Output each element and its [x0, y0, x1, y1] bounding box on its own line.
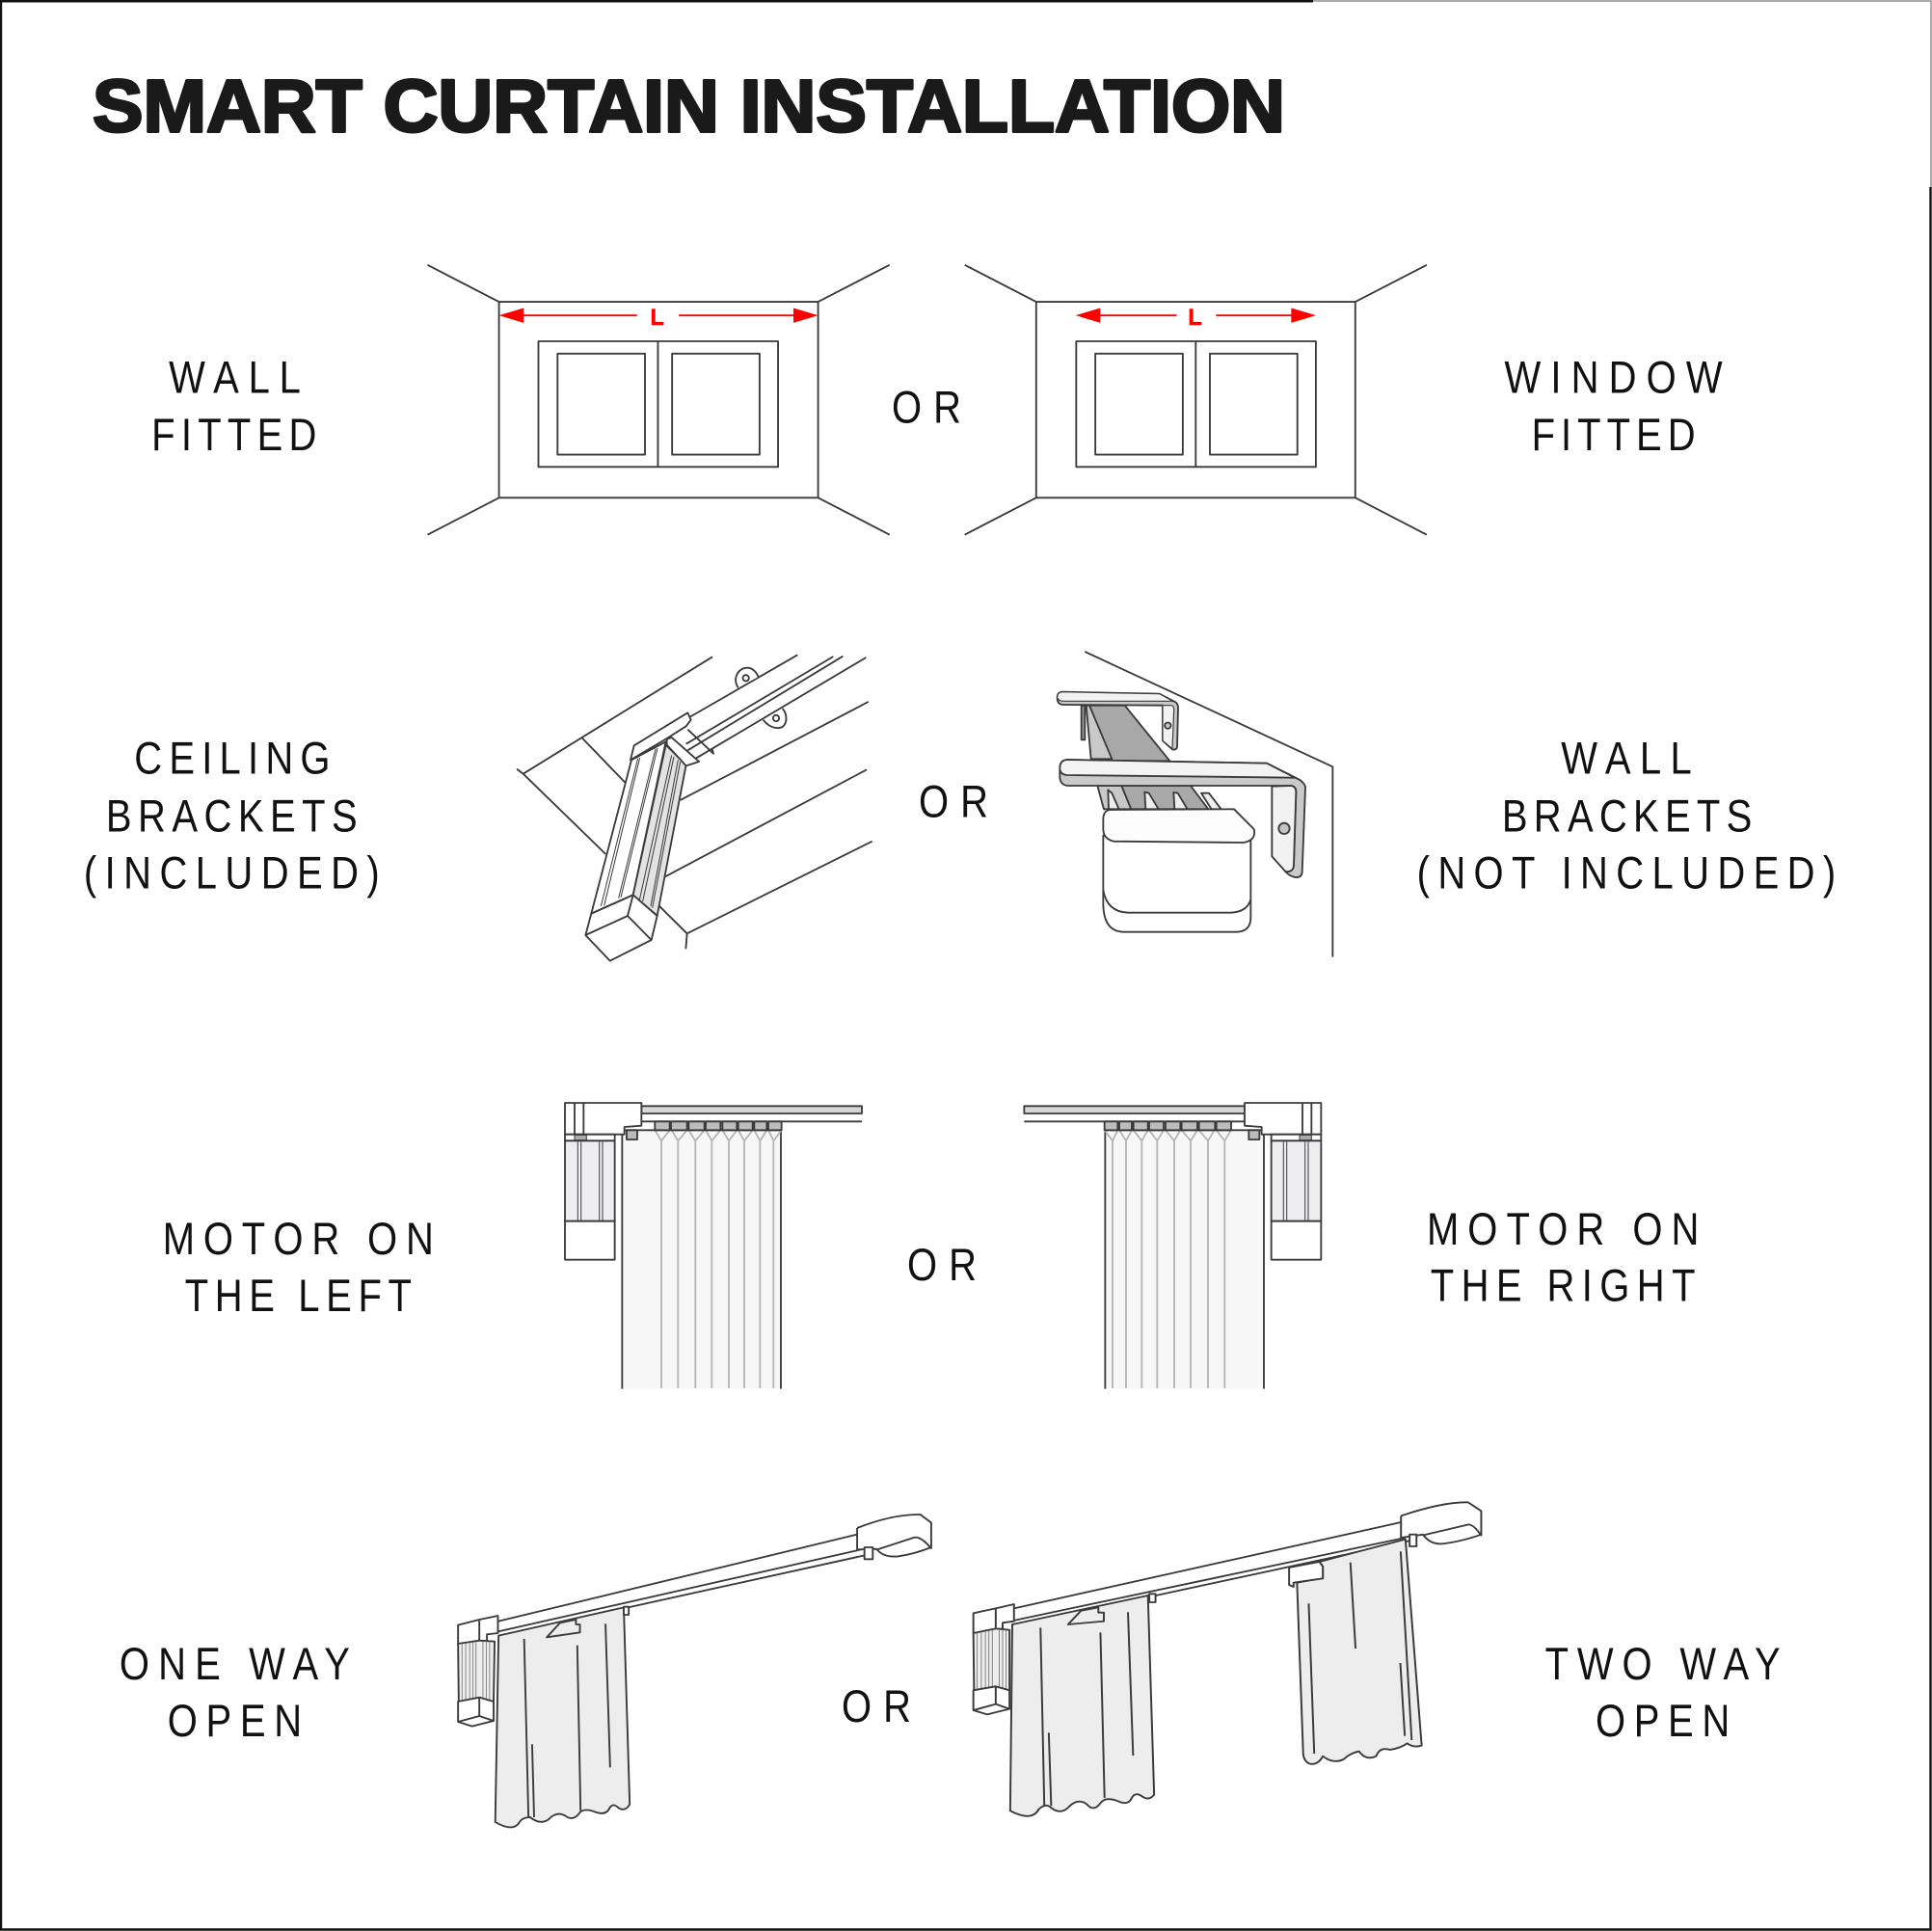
diagram: wall fitted window	[427, 265, 890, 535]
label: two way open: OPEN	[1596, 1696, 1730, 1747]
dimension arrow: window width: L	[1188, 306, 1202, 331]
rail lines	[686, 655, 866, 759]
track	[487, 1535, 865, 1634]
label: window fitted	[1504, 353, 1723, 461]
diagram: ceiling bracket with motor	[517, 655, 872, 961]
pleats	[1105, 1130, 1231, 1388]
label: ceiling brackets included: (INCLUDED)	[84, 847, 380, 898]
dimension arrow: full wall width	[499, 306, 818, 331]
title: SMART CURTAIN INSTALLATION	[93, 66, 1285, 148]
label: motor on the left	[163, 1214, 434, 1322]
motor head	[565, 1103, 641, 1135]
label: wall brackets not included: (NOT INCLUDED)	[1417, 847, 1836, 898]
motor body	[1272, 1140, 1321, 1221]
diagram: motor on right	[1024, 1103, 1321, 1389]
label: one way open	[120, 1639, 350, 1747]
label: motor on the right	[1427, 1204, 1699, 1311]
label: two way open	[1545, 1639, 1781, 1747]
label: motor on the right: THE RIGHT	[1431, 1261, 1696, 1311]
label: window fitted: WINDOW	[1504, 353, 1723, 404]
label: or: OR	[919, 778, 988, 827]
motor body	[565, 1140, 615, 1221]
motor	[1103, 836, 1250, 932]
curtain	[622, 1130, 781, 1389]
label: or: OR	[842, 1682, 911, 1732]
motor	[458, 1616, 497, 1727]
rear bracket	[1058, 692, 1178, 750]
curtain clip	[547, 1620, 580, 1637]
label: or: OR	[892, 384, 961, 433]
label: motor on the left: THE LEFT	[185, 1271, 412, 1322]
track end cap	[857, 1515, 931, 1557]
diagram: motor on left	[565, 1103, 862, 1389]
label: wall fitted	[151, 353, 316, 461]
label: window fitted: FITTED	[1532, 410, 1696, 461]
diagram: one way open curtain	[458, 1515, 931, 1827]
motor top clamp	[631, 712, 691, 760]
curtain	[496, 1607, 630, 1827]
label: wall fitted: FITTED	[151, 410, 316, 461]
label: one way open: ONE WAY	[120, 1639, 350, 1690]
left curtain	[1010, 1596, 1154, 1816]
label: wall fitted: WALL	[169, 353, 301, 404]
curtain	[1105, 1130, 1264, 1389]
dimension arrow: window width	[1076, 306, 1316, 331]
label: or: OR	[907, 1241, 977, 1291]
diagram: window fitted window	[965, 265, 1427, 535]
label: ceiling brackets included: BRACKETS	[106, 791, 358, 843]
label: one way open: OPEN	[168, 1696, 302, 1747]
dimension arrow: full wall width: L	[650, 306, 664, 331]
right curtain clip	[1289, 1562, 1323, 1587]
label: ceiling brackets included: CEILING	[134, 734, 331, 784]
left curtain clip	[1068, 1607, 1104, 1624]
motor	[974, 1604, 1014, 1714]
motor end cap	[585, 895, 657, 961]
motor head	[1245, 1103, 1321, 1135]
label: motor on the left: MOTOR ON	[163, 1214, 434, 1265]
track	[1024, 1106, 1245, 1113]
rail behind brackets	[1089, 706, 1169, 761]
motor body	[591, 741, 666, 914]
diagram: wall bracket with motor	[1058, 652, 1332, 957]
label: wall brackets not included: WALL	[1561, 734, 1692, 784]
pleats	[655, 1130, 782, 1388]
gliders	[655, 1121, 782, 1130]
diagram: two way open curtains	[974, 1502, 1481, 1816]
label: ceiling brackets included	[84, 734, 380, 898]
track	[641, 1106, 862, 1113]
label: wall brackets not included: BRACKETS	[1502, 791, 1752, 843]
right curtain	[1297, 1540, 1422, 1764]
track end cap	[1401, 1502, 1481, 1543]
label: wall brackets not included	[1417, 734, 1836, 898]
front bracket	[1060, 760, 1305, 877]
label: motor on the right: MOTOR ON	[1427, 1204, 1699, 1255]
icon: bracket screw tabs	[736, 668, 787, 728]
gliders	[1105, 1121, 1231, 1130]
track	[1003, 1522, 1409, 1623]
label: two way open: TWO WAY	[1545, 1639, 1781, 1690]
